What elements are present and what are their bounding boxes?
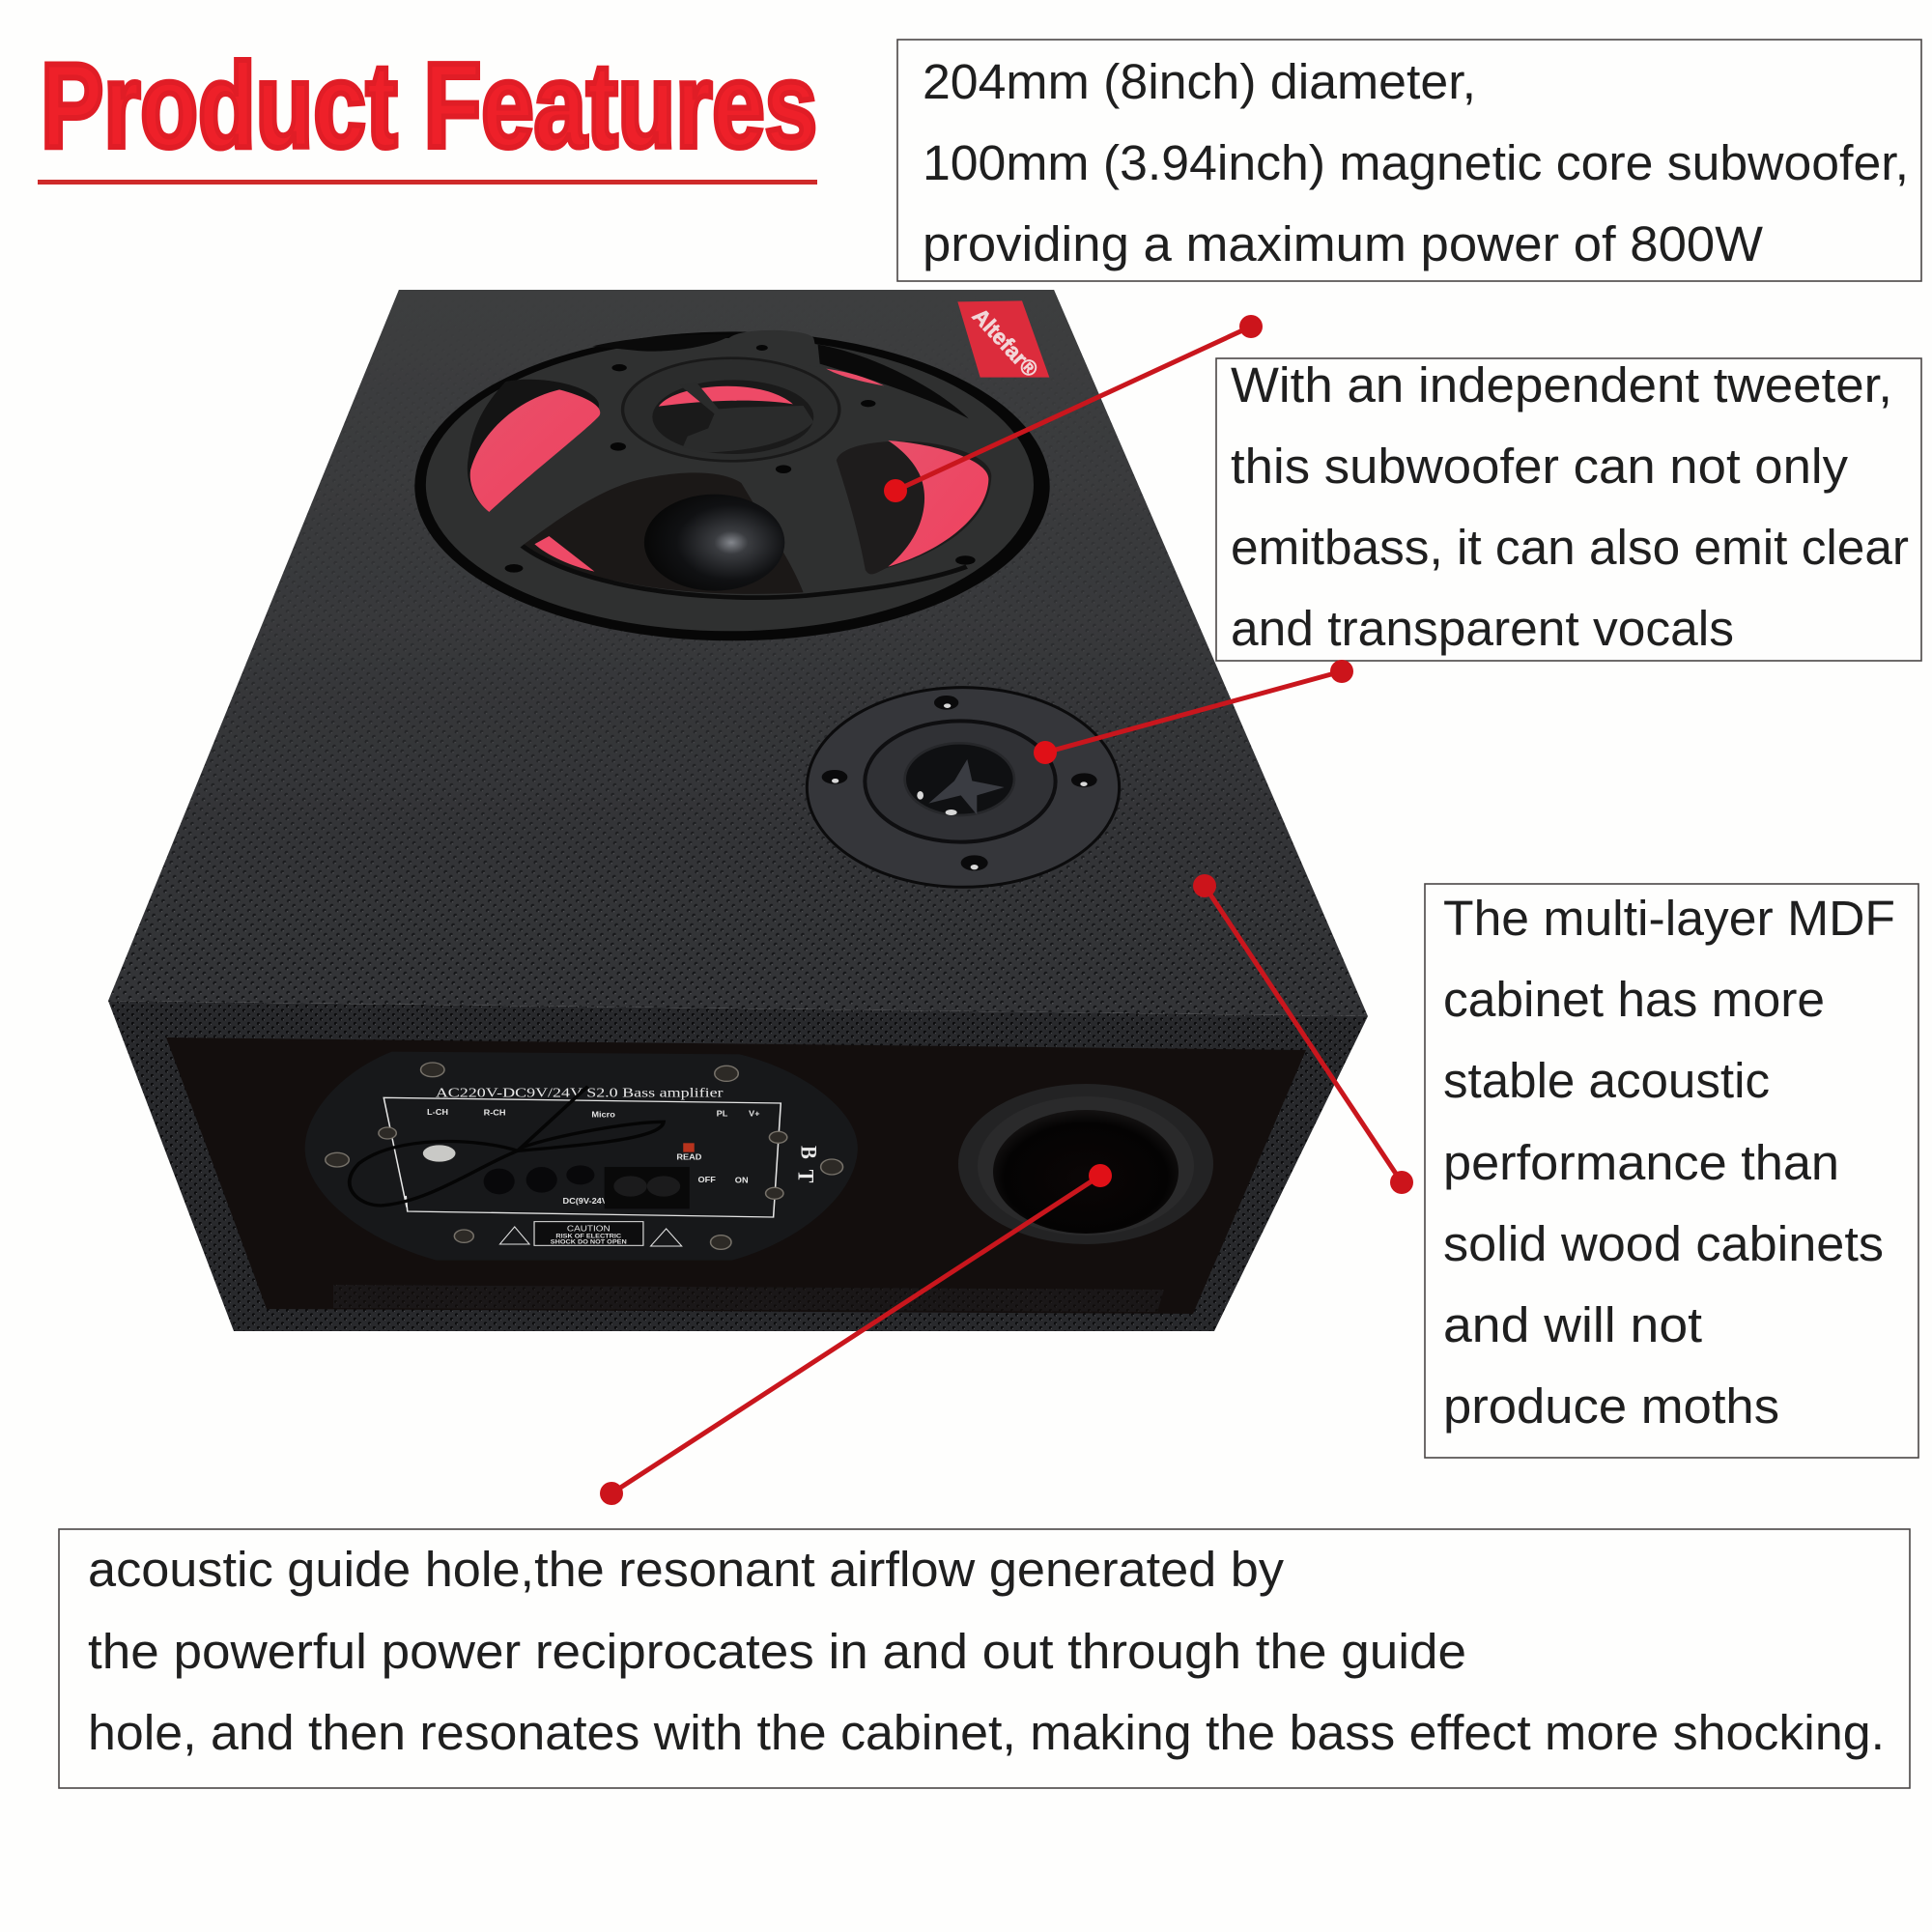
- control labels: PL: [717, 1109, 727, 1118]
- woofer driver: [414, 330, 1050, 640]
- panel: speaker power callout: [897, 40, 1921, 281]
- bottom opening: [525, 472, 804, 594]
- panel: acoustic guide hole callout: hole, and then resonates with the cabinet, making the bass effect more shocking.: [88, 1705, 1885, 1760]
- caution label: CAUTION: [567, 1224, 611, 1234]
- amplifier plate: [305, 1052, 858, 1261]
- panel: MDF cabinet callout: [1425, 884, 1918, 1458]
- panel: tweeter callout: [1216, 357, 1921, 661]
- cabinet front recess: [166, 1037, 1306, 1314]
- panel: tweeter callout: emitbass, it can also emit clear: [1231, 520, 1909, 575]
- coiled cable: [350, 1087, 664, 1206]
- panel: speaker power callout: providing a maximum power of 800W: [923, 216, 1763, 271]
- panel: MDF cabinet callout: stable acoustic: [1443, 1053, 1770, 1108]
- tweeter highlights: [832, 703, 1088, 869]
- arrow: cabinet pointer: [1193, 874, 1413, 1194]
- volume knobs: [484, 1165, 594, 1194]
- panel: MDF cabinet callout: performance than: [1443, 1135, 1839, 1190]
- panel: tweeter callout: With an independent tweeter,: [1231, 357, 1892, 412]
- control labels: READ: [676, 1152, 701, 1162]
- tweeter plate: [807, 688, 1120, 887]
- frame screw holes: [505, 345, 976, 573]
- frame lower rim line: [523, 546, 967, 598]
- tweeter star phase plug: [928, 759, 1005, 814]
- arrow: guide hole pointer: [600, 1164, 1112, 1505]
- brand badge: Altefar®: [968, 303, 1043, 382]
- control labels: [427, 1108, 759, 1206]
- caution label: RISK OF ELECTRIC: [555, 1234, 621, 1239]
- panel: MDF cabinet callout: cabinet has more: [1443, 972, 1825, 1027]
- panel: acoustic guide hole callout: acoustic guide hole,the resonant airflow generated by: [88, 1542, 1285, 1597]
- pink sliver upper right: [826, 369, 884, 385]
- panel: MDF cabinet callout: produce moths: [1443, 1378, 1779, 1434]
- panel: acoustic guide hole callout: the powerful power reciprocates in and out through the guide: [88, 1624, 1466, 1679]
- woofer frame: [426, 330, 1034, 631]
- tweeter mount recess: [652, 380, 813, 454]
- control labels: Micro: [591, 1110, 615, 1120]
- cabinet front frame: [108, 1001, 1368, 1331]
- arrow: woofer pointer: [884, 315, 1263, 502]
- control labels: OFF: [698, 1176, 716, 1184]
- tweeter: [807, 688, 1120, 887]
- tweeter inner ring: [865, 721, 1056, 842]
- left opening: [468, 380, 600, 512]
- panel: speaker power callout: 204mm (8inch) diameter,: [923, 54, 1476, 109]
- caution label: [534, 1222, 643, 1246]
- BT marking: [793, 1146, 822, 1183]
- model text: AC220V-DC9V/24V S2.0 Bass amplifier: [436, 1086, 724, 1100]
- control labels: ON: [735, 1176, 749, 1185]
- arrow: tweeter pointer: [1034, 660, 1353, 764]
- panel: MDF cabinet callout: solid wood cabinets: [1443, 1216, 1884, 1271]
- right opening: [837, 440, 991, 574]
- illustration: subwoofer cabinet: [108, 290, 1368, 1331]
- tweeter hole: [905, 743, 1014, 815]
- panel: MDF cabinet callout: The multi-layer MDF: [1443, 891, 1895, 946]
- panel: tweeter callout: and transparent vocals: [1231, 601, 1734, 656]
- recess dotted lower band: [333, 1285, 1164, 1312]
- control labels: DC(9V-24V): [562, 1197, 611, 1206]
- power socket: [605, 1167, 690, 1208]
- panel: tweeter callout: this subwoofer can not only: [1231, 439, 1849, 494]
- warning triangles: [499, 1227, 682, 1246]
- title underline: [38, 180, 817, 185]
- control labels: L-CH: [427, 1108, 448, 1117]
- caution label: SHOCK DO NOT OPEN: [551, 1239, 627, 1246]
- woofer outer black ring: [414, 331, 1050, 640]
- BT marking: B: [796, 1146, 822, 1159]
- control labels: V+: [749, 1109, 759, 1118]
- upper openings: [592, 334, 969, 418]
- BT marking: T: [793, 1170, 819, 1183]
- tweeter screws: [822, 696, 1097, 870]
- input knob glare: [423, 1145, 455, 1162]
- dust cap dome: [644, 495, 784, 591]
- cabinet top face: [108, 290, 1368, 1016]
- acoustic guide hole: [958, 1084, 1213, 1244]
- panel: MDF cabinet callout: and will not: [1443, 1297, 1702, 1352]
- title: Product Features: Product Features: [41, 40, 817, 173]
- plate body: [305, 1052, 858, 1261]
- control panel outline: [384, 1097, 781, 1217]
- red LED: [683, 1143, 695, 1152]
- panel: acoustic guide hole callout: [59, 1529, 1910, 1788]
- control labels: R-CH: [484, 1108, 506, 1118]
- panel: speaker power callout: 100mm (3.94inch) magnetic core subwoofer,: [923, 135, 1909, 190]
- hub ring: [623, 358, 839, 461]
- plate screws: [326, 1063, 843, 1249]
